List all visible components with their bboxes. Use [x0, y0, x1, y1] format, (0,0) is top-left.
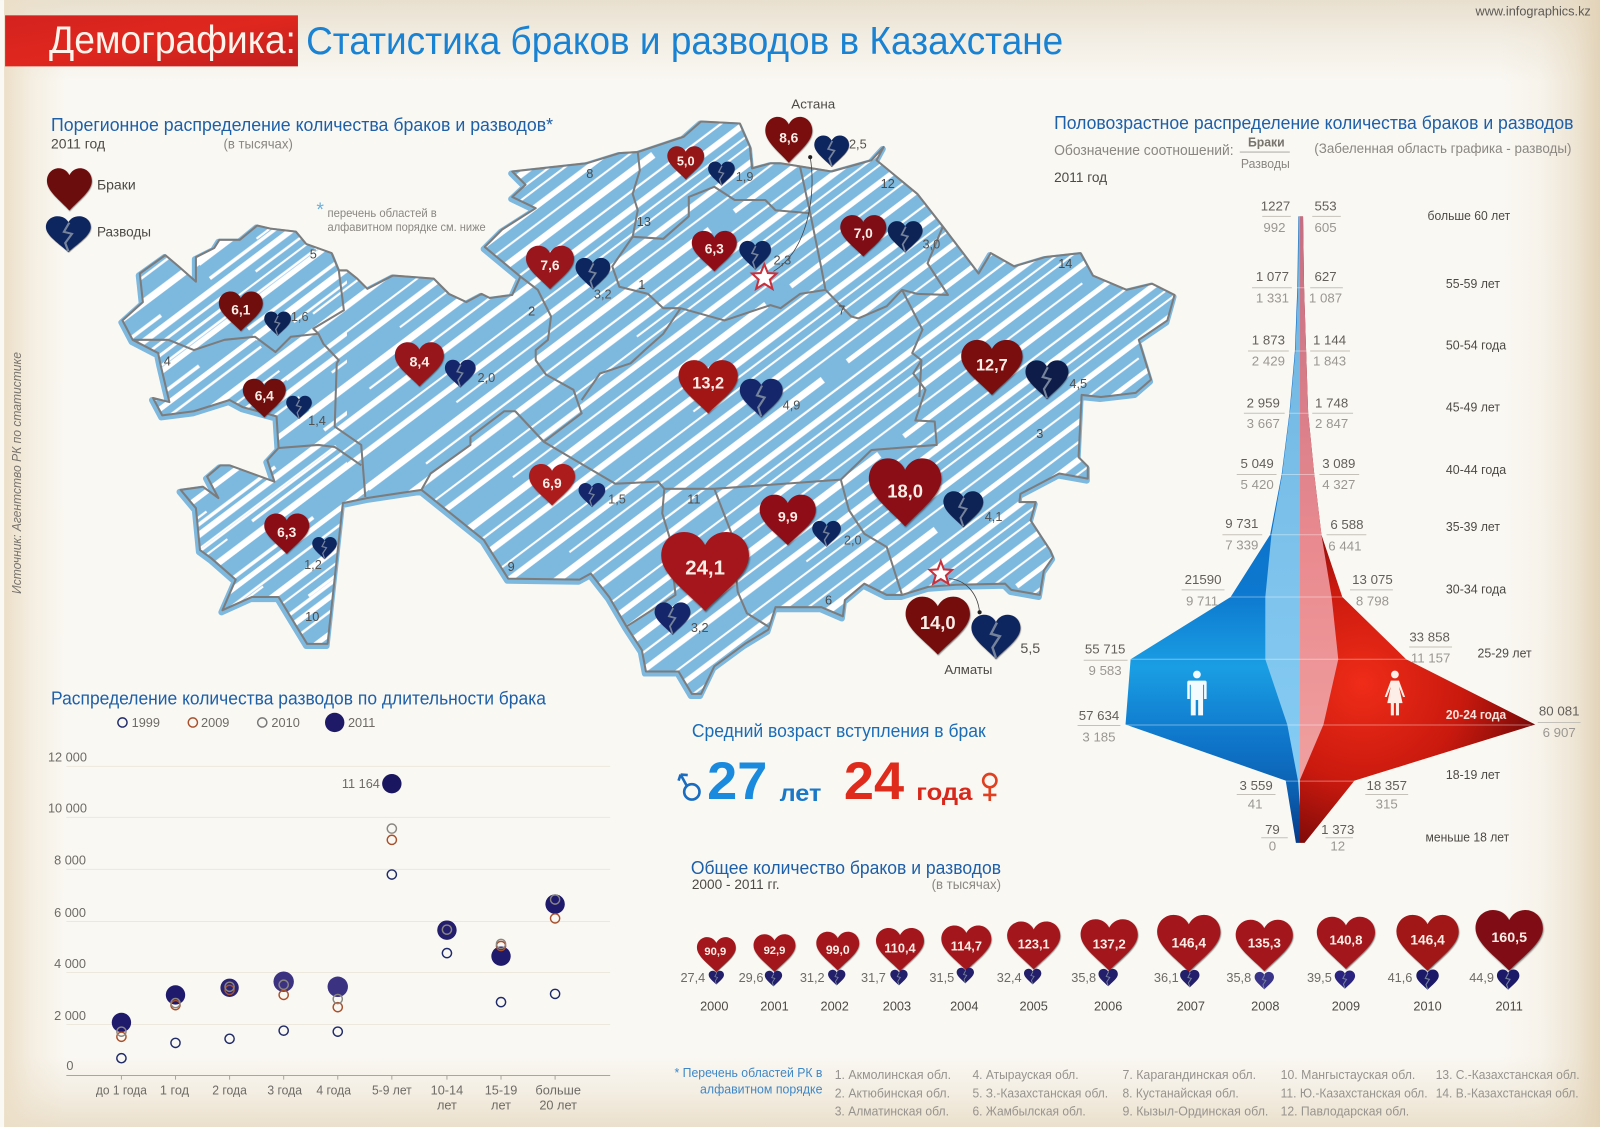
- panel: regional map: [46, 97, 1174, 696]
- heart: Pavlodar divorces: 3,0: [922, 236, 940, 251]
- heart: Kostanay divorces: 3,2: [594, 286, 612, 301]
- pyramid values: marriages: 627: [1314, 269, 1337, 284]
- source note: Источник: Агентство РК по статистике: [9, 352, 24, 594]
- region numbers: 9: [508, 559, 515, 574]
- pyramid values: divorces: 5 420: [1241, 477, 1274, 492]
- heart: West Kazakhstan divorces: 1,6: [291, 309, 309, 324]
- pyramid values: divorces: 1 843: [1313, 354, 1346, 369]
- region list: 4. Атырауская обл.: [972, 1067, 1079, 1082]
- pyramid values: marriages: 55 715: [1085, 642, 1125, 657]
- region numbers: 2: [528, 304, 535, 319]
- year 2009: 2009: [1332, 999, 1360, 1014]
- pyramid values: divorces: 9 711: [1186, 594, 1218, 609]
- year 2001: 29,6: [739, 970, 763, 985]
- heart: Atyrau marriages: [243, 379, 286, 417]
- pyramid values: divorces: 3 667: [1247, 416, 1280, 431]
- year 2006: 35,8: [1071, 970, 1096, 985]
- legend: years: [118, 713, 375, 732]
- note: region list: *: [316, 199, 324, 221]
- year 2001: 2001: [760, 999, 789, 1014]
- pyramid values: marriages: 5 049: [1241, 456, 1274, 471]
- year 2001: 92,9: [764, 945, 785, 957]
- year 2009: 140,8: [1329, 932, 1363, 947]
- year 2003: [861, 928, 924, 1014]
- year 2002: 31,2: [800, 970, 825, 985]
- heart: Pavlodar marriages: 7,0: [854, 226, 873, 241]
- heart: Aktobe divorces: [445, 360, 495, 387]
- heading: age-sex distribution: 2011 год: [1054, 170, 1107, 185]
- heart: Almaty city marriages: [906, 597, 970, 654]
- pyramid values: marriages: 3 089: [1322, 456, 1355, 471]
- heart: Mangystau marriages: [264, 514, 309, 554]
- heart: Almaty city divorces: 5,5: [1020, 641, 1040, 657]
- pyramid values: marriages: 33 858: [1409, 629, 1450, 644]
- pyramid values: marriages: 2 959: [1247, 396, 1280, 411]
- heading: regional distribution: 2011 год: [51, 136, 105, 151]
- pyramid values: marriages: 1 873: [1252, 332, 1285, 347]
- year 2003: 110,4: [884, 940, 917, 955]
- region list: 11. Ю.-Казахстанская обл.: [1281, 1085, 1428, 1100]
- heart: Aktobe divorces: 2,0: [478, 370, 495, 385]
- icon: woman: [1385, 671, 1405, 715]
- heading: average age: Средний возраст вступления в брак: [692, 720, 987, 741]
- heart: Pavlodar divorces: [888, 221, 940, 252]
- pyramid values: divorces: 0: [1269, 838, 1276, 853]
- x axis labels: 1 год: [160, 1082, 190, 1097]
- year 2007: 146,4: [1172, 935, 1206, 950]
- pyramid values: marriages: 553: [1314, 199, 1337, 214]
- note: region list: [316, 199, 486, 234]
- separators for pyramid values: [1078, 216, 1581, 838]
- year 2002: [800, 932, 859, 1014]
- year 2004: 31,5: [929, 970, 954, 985]
- note: region list: перечень областей в: [328, 207, 437, 220]
- connector: Almaty: [949, 579, 982, 614]
- region numbers: 5: [310, 247, 317, 262]
- age group labels: 40-44 года: [1446, 462, 1507, 477]
- region numbers: 13: [637, 214, 651, 229]
- legend: marriages and divorces: Браки: [97, 178, 136, 194]
- heart: Karaganda divorces: [740, 379, 800, 417]
- heart: Zhambyl marriages: [760, 495, 816, 545]
- heart: East Kazakhstan divorces: [1026, 360, 1087, 399]
- pyramid values: divorces: 2 847: [1315, 416, 1348, 431]
- heart: Atyrau marriages: 6,4: [255, 388, 274, 403]
- heart: South Kazakhstan marriages: 24,1: [685, 557, 725, 579]
- pyramid values: marriages: 1 748: [1315, 396, 1348, 411]
- axis: [66, 1076, 610, 1080]
- heading: totals: (в тысячах): [932, 877, 1001, 892]
- x axis labels: 3 года: [267, 1082, 303, 1097]
- pyramid values: marriages: 9 731: [1225, 516, 1258, 531]
- pyramid values: divorces: [1082, 220, 1576, 853]
- region list: 10. Мангыстауская обл.: [1281, 1067, 1415, 1082]
- heart: Almaty region divorces: 4,1: [985, 509, 1002, 524]
- year 2000: 90,9: [704, 946, 726, 958]
- heart: Kostanay marriages: [526, 246, 574, 289]
- region list: 1. Акмолинская обл.: [835, 1067, 951, 1082]
- age group labels: 50-54 года: [1446, 337, 1507, 352]
- year 2006: 2006: [1094, 999, 1122, 1014]
- legend: marriages and divorces: Разводы: [97, 225, 151, 241]
- heart: Kyzylorda divorces: 1,5: [608, 492, 626, 507]
- dots: 2009: [117, 835, 560, 1041]
- year 2008: 2008: [1251, 999, 1279, 1014]
- heart: Aktobe marriages: 8,4: [409, 354, 429, 370]
- heart: Astana marriages: [765, 117, 812, 163]
- region numbers: 8: [586, 166, 593, 181]
- pyramid values: marriages: 79: [1265, 822, 1280, 837]
- heading: age-sex distribution: Браки: [1248, 134, 1285, 149]
- year 2000: 27,4: [680, 970, 705, 985]
- y axis labels: 2 000: [54, 1008, 86, 1023]
- dots: 1999: [117, 870, 560, 1063]
- x axis labels: 10-14: [431, 1082, 463, 1097]
- pyramid values: divorces: 605: [1314, 220, 1337, 235]
- pyramid values: marriages: 18 357: [1366, 778, 1407, 793]
- year 2009: [1307, 917, 1375, 1014]
- pyramid row lines: [1126, 288, 1531, 781]
- year 2003: 2003: [883, 999, 911, 1014]
- pyramid values: divorces: 4 327: [1322, 477, 1355, 492]
- icon: male symbol: [679, 775, 699, 800]
- pyramid values: divorces: 8 798: [1356, 594, 1389, 609]
- heart: Karaganda marriages: [679, 360, 738, 413]
- region list: 14. В.-Казахстанская обл.: [1436, 1085, 1579, 1100]
- pyramid values: marriages: 6 588: [1330, 517, 1364, 532]
- x axis labels: 15-19: [485, 1082, 517, 1097]
- year 2002: 99,0: [826, 943, 850, 957]
- star: Almaty: [930, 561, 952, 584]
- heart: Kyzylorda marriages: [529, 464, 575, 505]
- pyramid values: divorces: 41: [1248, 797, 1262, 812]
- men age value: лет: [780, 780, 821, 806]
- heading: totals: Общее количество браков и разводов: [691, 857, 1001, 878]
- pyramid values: marriages: 3 559: [1240, 778, 1273, 793]
- legend: marriages and divorces: [46, 168, 151, 252]
- pyramid values: marriages: 21590: [1185, 572, 1221, 587]
- grid lines: [66, 766, 610, 1025]
- heart: West Kazakhstan marriages: 6,1: [231, 303, 251, 318]
- title banner: Демографика:: [49, 19, 296, 62]
- heart: Mangystau marriages: 6,3: [277, 525, 297, 540]
- heart: North Kazakhstan marriages: [667, 146, 704, 179]
- age group labels: меньше 18 лет: [1426, 829, 1509, 844]
- heart: Kostanay marriages: 7,6: [540, 258, 560, 273]
- heart: Akmola marriages: [692, 231, 737, 271]
- icon: female symbol: [983, 774, 996, 801]
- pyramid values: marriages: 1227: [1261, 199, 1290, 214]
- region numbers: 11: [687, 492, 701, 507]
- pyramid values: marriages: 1 077: [1256, 269, 1289, 284]
- y axis labels: 10 000: [48, 801, 87, 816]
- age group labels: больше 60 лет: [1428, 208, 1510, 223]
- year 2011: 44,9: [1469, 970, 1494, 985]
- legend: years: 2011: [348, 715, 375, 730]
- women age value: 24: [844, 752, 905, 811]
- heading: age-sex distribution: Обозначение соотношений:: [1054, 143, 1234, 159]
- x axis labels: больше: [535, 1082, 581, 1097]
- website credit: www.infographics.kz: [1475, 4, 1591, 19]
- heart: Almaty region marriages: 18,0: [887, 480, 923, 501]
- heart: South Kazakhstan divorces: [655, 602, 709, 635]
- pyramid chart: men: [1126, 216, 1300, 843]
- dots: 2010: [117, 824, 560, 1036]
- year 2004: 2004: [950, 999, 978, 1014]
- year 2001: [739, 934, 795, 1014]
- heading: regional distribution: [51, 114, 553, 151]
- year 2002: 2002: [821, 999, 849, 1014]
- region list note: алфавитном порядке: [700, 1081, 822, 1096]
- year 2005: 123,1: [1018, 936, 1050, 951]
- year 2007: [1154, 915, 1220, 1014]
- y axis labels: 6 000: [54, 905, 86, 920]
- year 2006: [1071, 919, 1138, 1014]
- heart: Atyrau divorces: 1,4: [308, 413, 326, 428]
- heart: Almaty region marriages: [869, 458, 941, 526]
- x axis labels: 20 лет: [539, 1098, 577, 1113]
- pyramid values: marriages: [1079, 199, 1579, 837]
- pyramid values: divorces: 11 157: [1411, 651, 1450, 666]
- pyramid values: divorces: 3 185: [1082, 729, 1116, 744]
- women age value: года: [916, 779, 973, 805]
- region numbers: 6: [825, 593, 832, 608]
- heart: Zhambyl divorces: [812, 521, 862, 547]
- heading: age-sex distribution: Разводы: [1241, 156, 1290, 171]
- year 2005: 2005: [1019, 999, 1048, 1014]
- heart: Astana divorces: 2,5: [849, 136, 867, 151]
- age group labels: 35-39 лет: [1446, 519, 1500, 534]
- region list: 13. С.-Казахстанская обл.: [1436, 1067, 1580, 1082]
- heart: Mangystau divorces: [304, 537, 337, 572]
- heart: Kostanay divorces: [576, 258, 612, 301]
- icon: man: [1187, 671, 1207, 715]
- year 2007: 36,1: [1154, 970, 1179, 985]
- panel: divorces by marriage duration: [48, 687, 610, 1113]
- region numbers: 7: [838, 303, 845, 318]
- heart: Mangystau divorces: 1,2: [304, 557, 322, 572]
- heading: regional distribution: (в тысячах): [223, 136, 293, 151]
- pyramid values: marriages: 80 081: [1539, 704, 1579, 719]
- heart: Karaganda marriages: 13,2: [692, 375, 724, 393]
- pyramid values: marriages: 13 075: [1352, 572, 1393, 587]
- region list note: * Перечень областей РК в: [674, 1065, 823, 1080]
- panel: totals by year: [680, 857, 1543, 1014]
- region numbers: 10: [305, 609, 319, 624]
- year 2004: [929, 925, 991, 1014]
- star: Astana: [752, 264, 777, 289]
- year 2005: 32,4: [997, 970, 1022, 985]
- legend: years: 1999: [132, 715, 160, 730]
- region numbers: 14: [1058, 256, 1072, 271]
- women age value: [844, 752, 973, 811]
- age group labels: [1426, 208, 1532, 844]
- heart: Karaganda divorces: 4,9: [783, 398, 800, 413]
- year 2006: 137,2: [1093, 936, 1126, 951]
- year 2007: 2007: [1177, 999, 1205, 1014]
- year 2004: 114,7: [951, 938, 982, 953]
- region list note: [674, 1065, 823, 1096]
- heart: Pavlodar marriages: [840, 215, 886, 256]
- year 2008: 135,3: [1248, 935, 1281, 950]
- y axis labels: [48, 750, 87, 1073]
- heart: Almaty city divorces: [971, 615, 1040, 659]
- region list: [835, 1067, 1580, 1119]
- region list: 6. Жамбылская обл.: [972, 1104, 1086, 1119]
- heart: West Kazakhstan marriages: [219, 292, 263, 331]
- city label: Almaty: Алматы: [944, 662, 992, 677]
- map of Kazakhstan: [102, 121, 1174, 696]
- year 2003: 31,7: [861, 970, 886, 985]
- pyramid values: divorces: 7 339: [1225, 537, 1258, 552]
- heart: North Kazakhstan divorces: 1,9: [736, 169, 753, 184]
- pyramid values: divorces: 6 907: [1543, 725, 1576, 740]
- heart: Akmola divorces: 2,3: [773, 253, 791, 268]
- year 2009: 39,5: [1307, 970, 1332, 985]
- pyramid values: divorces: 12: [1330, 838, 1345, 853]
- y axis labels: 8 000: [54, 853, 86, 868]
- x axis labels: [96, 1082, 581, 1113]
- year 2008: [1226, 920, 1293, 1014]
- x axis labels: лет: [491, 1098, 511, 1113]
- pyramid values: divorces: 6 441: [1328, 538, 1361, 553]
- heart: Almaty region divorces: [943, 491, 1002, 527]
- pyramid values: divorces: 2 429: [1252, 354, 1285, 369]
- year 2005: [997, 922, 1060, 1014]
- y axis labels: 0: [66, 1058, 73, 1073]
- pyramid values: marriages: 1 373: [1321, 822, 1354, 837]
- year 2008: 35,8: [1226, 970, 1251, 985]
- pyramid values: marriages: 57 634: [1079, 708, 1119, 723]
- year 2000: [680, 937, 736, 1014]
- year 2000: 2000: [700, 999, 728, 1014]
- pyramid values: divorces: 992: [1263, 220, 1286, 235]
- heart: Kyzylorda marriages: 6,9: [542, 476, 562, 491]
- heart: Zhambyl divorces: 2,0: [844, 532, 862, 547]
- age group labels: 45-49 лет: [1446, 400, 1500, 415]
- heading: age-sex distribution: Половозрастное распределение количества браков и разводов: [1054, 112, 1573, 133]
- region list: 9. Кызыл-Ординская обл.: [1122, 1104, 1268, 1119]
- region numbers: 12: [881, 176, 895, 191]
- heading: age-sex distribution: (Забеленная область графика - разводы): [1314, 141, 1571, 157]
- year 2010: 2010: [1413, 999, 1442, 1014]
- heading: totals: 2000 - 2011 гг.: [692, 877, 780, 892]
- x axis labels: 5-9 лет: [372, 1082, 412, 1097]
- age group labels: 25-29 лет: [1478, 646, 1532, 661]
- year 2010: 146,4: [1410, 932, 1445, 947]
- title: Статистика браков и разводов в Казахстане: [306, 20, 1063, 63]
- dots: 2011: [112, 774, 565, 1032]
- pyramid chart: women: [1300, 216, 1535, 843]
- pyramid values: divorces: 1 331: [1256, 290, 1289, 305]
- region list: 5. З.-Казахстанская обл.: [972, 1085, 1108, 1100]
- panel: average marriage age: [679, 720, 996, 811]
- age group labels: 55-59 лет: [1446, 276, 1500, 291]
- heart: East Kazakhstan marriages: 12,7: [976, 356, 1008, 374]
- men age value: [707, 752, 821, 811]
- year 2011: [1469, 910, 1543, 1014]
- age group labels: 30-34 года: [1446, 581, 1507, 596]
- men age value: 27: [707, 752, 767, 811]
- y axis labels: 12 000: [48, 750, 87, 765]
- city label: Astana: Астана: [791, 97, 836, 112]
- connector: Astana: [773, 155, 812, 271]
- year 2011: 2011: [1495, 999, 1523, 1014]
- heart: North Kazakhstan marriages: 5,0: [677, 154, 695, 169]
- age group labels: 18-19 лет: [1446, 767, 1500, 782]
- x axis labels: до 1 года: [96, 1082, 148, 1097]
- legend: years: 2010: [271, 715, 300, 730]
- y axis labels: 4 000: [54, 956, 86, 971]
- heading: age-sex distribution: [1054, 112, 1573, 185]
- heart: Zhambyl marriages: 9,9: [778, 509, 798, 525]
- pyramid values: divorces: 1 087: [1309, 290, 1342, 305]
- x axis labels: лет: [437, 1098, 457, 1113]
- x axis labels: 4 года: [316, 1082, 352, 1097]
- pyramid values: divorces: 9 583: [1089, 663, 1122, 678]
- heading: regional distribution: Порегионное распределение количества браков и разводов*: [51, 114, 553, 135]
- year 2010: [1388, 915, 1459, 1014]
- region numbers: 4: [164, 354, 171, 369]
- heart: West Kazakhstan divorces: [264, 309, 309, 335]
- heart: Astana marriages: 8,6: [779, 130, 799, 145]
- note: region list: алфавитном порядке см. ниже: [328, 221, 486, 234]
- heart: Astana divorces: [814, 135, 867, 167]
- heart: Atyrau divorces: [286, 396, 326, 428]
- legend: years: 2009: [201, 715, 229, 730]
- heading: divorces by duration: Распределение количества разводов по длительности брака: [51, 687, 547, 708]
- heart: South Kazakhstan divorces: 3,2: [691, 620, 709, 635]
- region list: 12. Павлодарская обл.: [1281, 1104, 1409, 1119]
- region list: 2. Актюбинская обл.: [835, 1085, 950, 1100]
- pyramid values: marriages: 1 144: [1313, 332, 1346, 347]
- heart: Aktobe marriages: [395, 342, 444, 386]
- heart: East Kazakhstan marriages: [961, 340, 1022, 395]
- heading: totals: [691, 857, 1001, 892]
- region list: 3. Алматинская обл.: [835, 1104, 949, 1119]
- peak value label: 11 164: [342, 776, 380, 791]
- heart: Akmola marriages: 6,3: [705, 242, 724, 257]
- heart: North Kazakhstan divorces: [708, 162, 753, 185]
- heart: Almaty city marriages: 14,0: [920, 612, 956, 633]
- x axis labels: 2 года: [212, 1082, 248, 1097]
- heart: South Kazakhstan marriages: [661, 532, 749, 611]
- region list: 8. Кустанайская обл.: [1122, 1085, 1239, 1100]
- age group labels: 20-24 года: [1446, 707, 1507, 722]
- year 2010: 41,6: [1388, 970, 1412, 985]
- heart: Akmola divorces: [739, 241, 791, 269]
- year 2011: 160,5: [1491, 930, 1527, 946]
- heart: East Kazakhstan divorces: 4,5: [1069, 376, 1087, 391]
- heart: Kyzylorda divorces: [579, 483, 626, 507]
- pyramid values: divorces: 315: [1376, 797, 1398, 812]
- region numbers: 3: [1036, 426, 1043, 441]
- panel: age-sex pyramid: [1054, 112, 1581, 853]
- region list: 7. Карагандинская обл.: [1122, 1067, 1256, 1082]
- region numbers: [164, 166, 1072, 624]
- region numbers: 1: [638, 277, 645, 292]
